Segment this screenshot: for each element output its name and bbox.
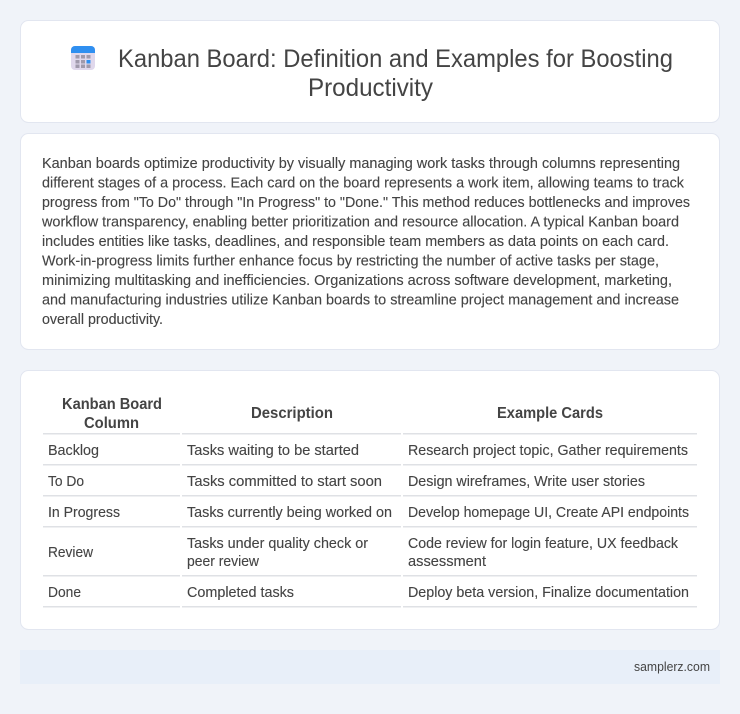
table row: Done: Completed tasks: [187, 585, 294, 601]
table row: In Progress: Develop homepage UI, Create API endpoints: [408, 505, 689, 521]
text block: definition: progress from "To Do" through "In Progress" to "Done." This method reduces bottlenecks and improves: [42, 195, 690, 211]
table row: Review: [43, 536, 697, 576]
icon: calendar: [71, 46, 95, 70]
text block: definition: Kanban boards optimize productivity by visually managing work tasks through columns representing: [42, 156, 680, 172]
table row: Review: Code review for login feature, UX feedback: [408, 536, 679, 552]
footer: samplerz.com: [634, 660, 710, 674]
table row: In Progress: Tasks currently being worked on: [187, 505, 392, 521]
text block: definition: [41, 156, 690, 328]
table row: To Do: To Do: [48, 474, 84, 490]
table header row: Column: [84, 415, 139, 432]
title: Kanban Board: Definition and Examples for Boosting: [118, 45, 673, 73]
panel: table: [20, 370, 720, 630]
table row: Review: Review: [48, 545, 94, 561]
table row: Done: Done: [48, 585, 81, 601]
table row: In Progress: [43, 505, 697, 528]
table row: Review: assessment: [408, 554, 486, 570]
table row: Done: Deploy beta version, Finalize documentation: [408, 585, 689, 601]
text block: definition: overall productivity.: [42, 312, 163, 328]
table header row: Description: [251, 405, 333, 422]
table row: Done: [43, 585, 697, 608]
table row: To Do: [43, 474, 697, 496]
text block: definition: includes entities like tasks, deadlines, and responsible team members as data points on each card.: [42, 234, 669, 250]
text block: definition: and manufacturing industries utilize Kanban boards to streamline project management and increase: [42, 292, 679, 308]
text block: definition: workflow transparency, enabling better prioritization and resource allocation. A typical Kanban board: [41, 214, 679, 230]
table header row: Kanban Board: [62, 396, 162, 413]
text block: definition: minimizing multitasking and inefficiencies. Organizations across software development, marketing,: [42, 273, 672, 289]
footer: [20, 650, 720, 684]
table row: To Do: Tasks committed to start soon: [187, 474, 382, 490]
header panel: [20, 20, 720, 122]
table header row: [43, 396, 697, 434]
table row: Review: Tasks under quality check or: [187, 536, 368, 552]
table header row: Example Cards: [497, 405, 603, 422]
table row: Backlog: Backlog: [48, 443, 99, 459]
table row: Review: peer review: [187, 554, 260, 570]
table row: Backlog: Tasks waiting to be started: [187, 443, 359, 459]
table row: In Progress: In Progress: [48, 505, 120, 521]
table row: Backlog: Research project topic, Gather requirements: [408, 443, 688, 459]
table row: To Do: Design wireframes, Write user stories: [408, 474, 645, 490]
text block: definition: Work-in-progress limits further enhance focus by restricting the number of active tasks per stage,: [42, 254, 659, 270]
title: Productivity: [308, 74, 433, 102]
text block: definition: different stages of a process. Each card on the board represents a work item, allowing teams to track: [42, 176, 685, 192]
panel: intro paragraph: [20, 134, 720, 350]
title: [118, 45, 673, 102]
table row: Backlog: [43, 443, 697, 466]
